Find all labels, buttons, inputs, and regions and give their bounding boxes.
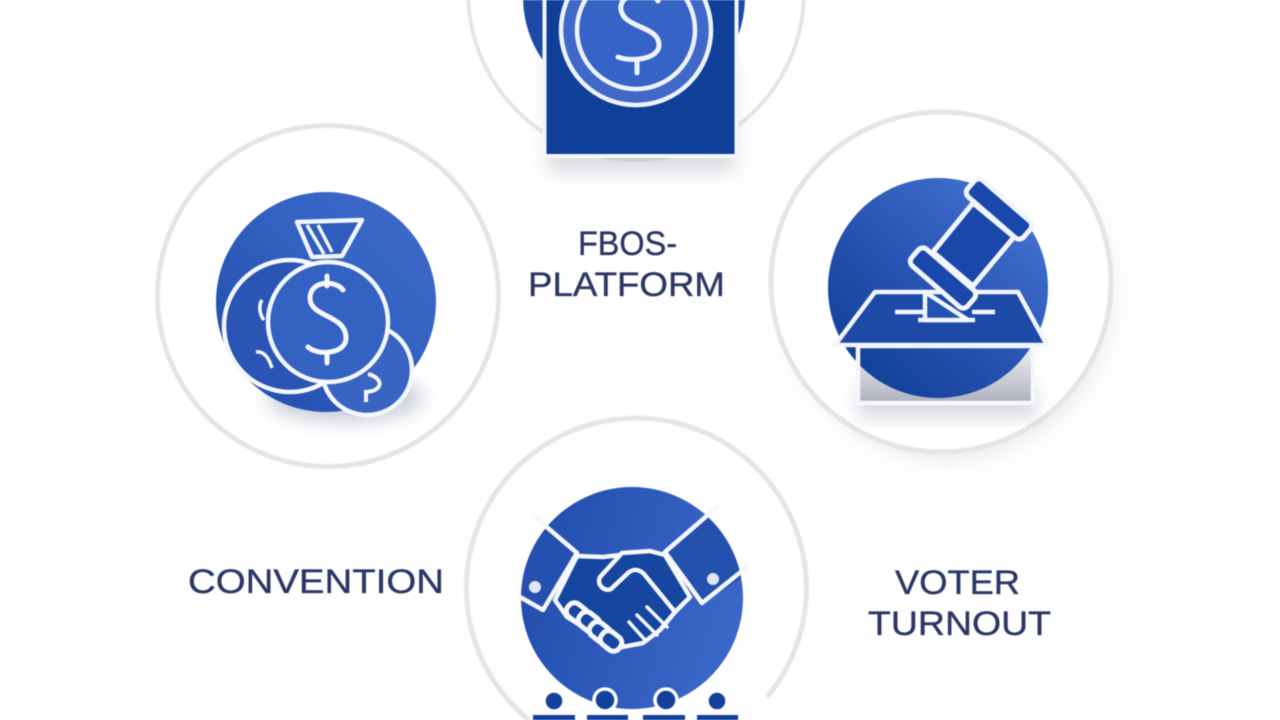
ballot box lid (835, 292, 1047, 345)
cuff fills (520, 518, 742, 600)
left blue disc (216, 192, 436, 412)
handshake (555, 551, 690, 654)
front dollar coin (268, 262, 388, 382)
back right coin (322, 325, 412, 415)
money bag neck (297, 220, 362, 257)
bottom blue disc (521, 487, 743, 709)
gavel (908, 176, 1034, 311)
label: FBOS-PLATFORM (528, 225, 725, 304)
ballot box shadow (858, 385, 1036, 417)
top ring (468, 0, 804, 160)
right blue disc (828, 178, 1048, 398)
label: CONVENTION: CONVENTION (188, 563, 444, 601)
coins shadow (267, 374, 423, 422)
audience figures (533, 689, 738, 720)
panel: left money bag icon (158, 126, 498, 466)
top blue disc (523, 0, 745, 108)
label: VOTER TURNOUT: VOTER (895, 564, 1020, 602)
right ring (771, 112, 1111, 452)
fingers (563, 600, 625, 654)
panel: right ballot gavel icon (771, 112, 1114, 462)
cuff outlines (520, 507, 747, 610)
hands (555, 551, 690, 648)
cuff buttons (529, 573, 719, 593)
label: FBOS-PLATFORM: PLATFORM (528, 266, 725, 304)
right ring shadow (782, 130, 1114, 462)
label: VOTER TURNOUT (868, 564, 1051, 643)
label: FBOS-PLATFORM: FBOS- (578, 225, 677, 263)
dollar coin (561, 0, 711, 105)
ballot box body (858, 346, 1033, 403)
panel: top funding icon (468, 0, 804, 172)
bottom ring (466, 418, 806, 720)
document shadow (548, 60, 734, 172)
panel: bottom handshake icon (466, 418, 806, 720)
label: VOTER TURNOUT: TURNOUT (868, 605, 1051, 643)
back left coin (224, 260, 356, 392)
left ring (158, 126, 498, 466)
ballot box outline (858, 346, 1033, 403)
document (544, 0, 736, 156)
